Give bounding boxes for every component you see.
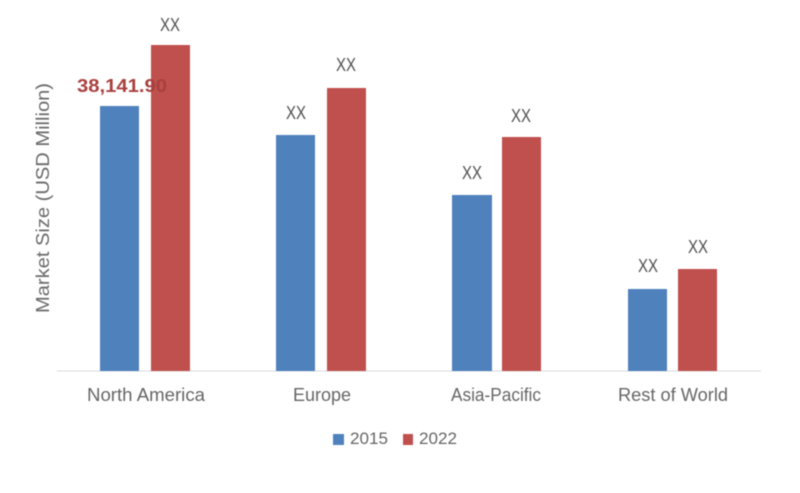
group: Asia-Pacific	[451, 106, 541, 405]
group: Europe: XX	[286, 103, 306, 123]
group: Europe	[276, 55, 366, 405]
legend: 2022	[419, 429, 457, 448]
y axis title: Market Size (USD Million)	[32, 83, 53, 313]
legend	[333, 429, 457, 448]
group: Rest of World: XX	[688, 237, 708, 257]
group: Rest of World: XX	[638, 256, 658, 276]
group: Asia-Pacific: XX	[511, 106, 531, 126]
group: Europe: Europe	[293, 385, 351, 405]
group: North America: 38,141.90	[77, 75, 167, 96]
group: Asia-Pacific: XX	[462, 163, 482, 183]
group: Europe: XX	[336, 55, 356, 75]
group: Rest of World: Rest of World	[618, 385, 728, 405]
group: North America: XX	[160, 15, 180, 35]
group: Asia-Pacific: Asia-Pacific	[451, 385, 541, 405]
legend: 2015	[350, 429, 388, 448]
group: North America: North America	[87, 385, 206, 405]
group: North America	[77, 15, 206, 405]
group: Rest of World	[618, 237, 728, 405]
